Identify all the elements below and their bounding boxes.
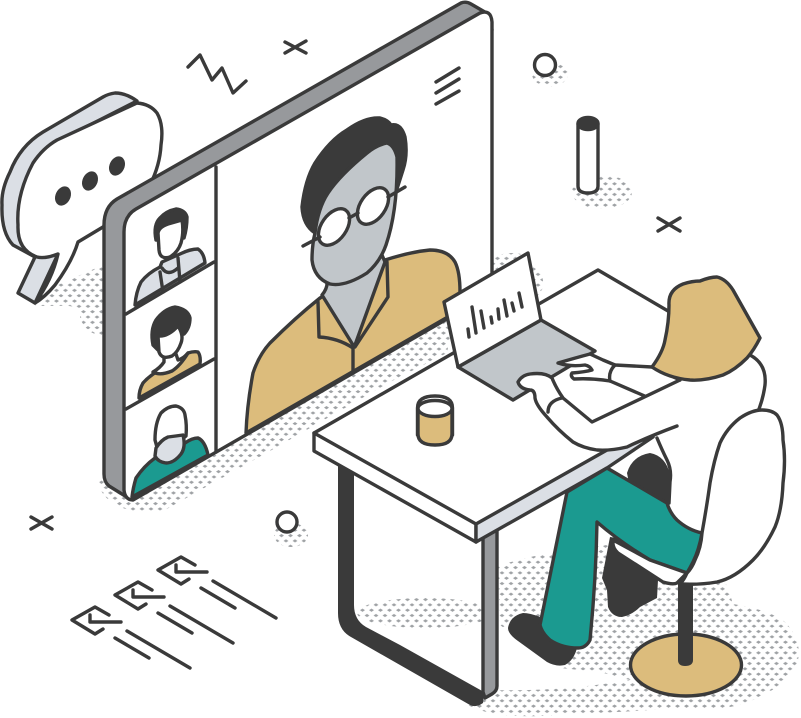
cup	[418, 396, 452, 445]
near leg	[540, 468, 702, 648]
speech bubble	[2, 93, 162, 303]
monitor screen	[124, 12, 492, 500]
far arm	[558, 354, 680, 397]
decorative cross: right	[658, 218, 680, 231]
chair seat	[680, 410, 784, 584]
menu icon	[436, 68, 459, 104]
participant: middle	[139, 307, 200, 398]
chair base	[630, 634, 742, 696]
neck	[322, 255, 385, 345]
far leg	[602, 453, 670, 617]
bubble side	[2, 93, 137, 303]
checklist item 1	[158, 557, 276, 618]
decorative cross: top	[285, 41, 306, 53]
desk left edge	[314, 433, 476, 542]
decorative zigzag	[188, 55, 246, 93]
participant: bottom	[132, 406, 208, 497]
hair	[652, 277, 760, 380]
chair post	[678, 583, 693, 666]
glasses	[303, 182, 405, 251]
bubble face	[18, 103, 162, 303]
desk top	[314, 270, 700, 524]
laptop chart	[468, 293, 522, 337]
decorative circle: bottom	[277, 512, 297, 532]
shoe	[508, 613, 577, 666]
monitor side frame	[104, 2, 492, 499]
checklist item 2	[115, 582, 233, 643]
main participant	[246, 118, 460, 433]
decorative cross: left	[31, 517, 52, 529]
rear desk leg frame	[338, 460, 484, 706]
decorative circle: top	[534, 54, 556, 76]
monitor	[104, 2, 492, 500]
torso	[535, 355, 765, 533]
front desk leg	[483, 525, 497, 698]
screen dividers	[126, 167, 216, 452]
near arm	[518, 374, 680, 450]
participant: top	[135, 209, 205, 305]
decorative cylinder	[578, 118, 598, 193]
person	[508, 277, 784, 696]
jacket	[246, 250, 460, 433]
laptop	[444, 253, 595, 400]
hair	[302, 118, 406, 233]
desk front edge	[476, 437, 653, 542]
checklist	[72, 557, 276, 668]
typing dots	[52, 154, 128, 208]
laptop screen	[444, 253, 541, 367]
trouser cuff	[613, 540, 687, 584]
laptop base	[458, 320, 595, 400]
lapels	[318, 262, 388, 372]
desk	[314, 270, 700, 706]
face	[312, 143, 397, 285]
checklist item 3	[72, 607, 190, 668]
